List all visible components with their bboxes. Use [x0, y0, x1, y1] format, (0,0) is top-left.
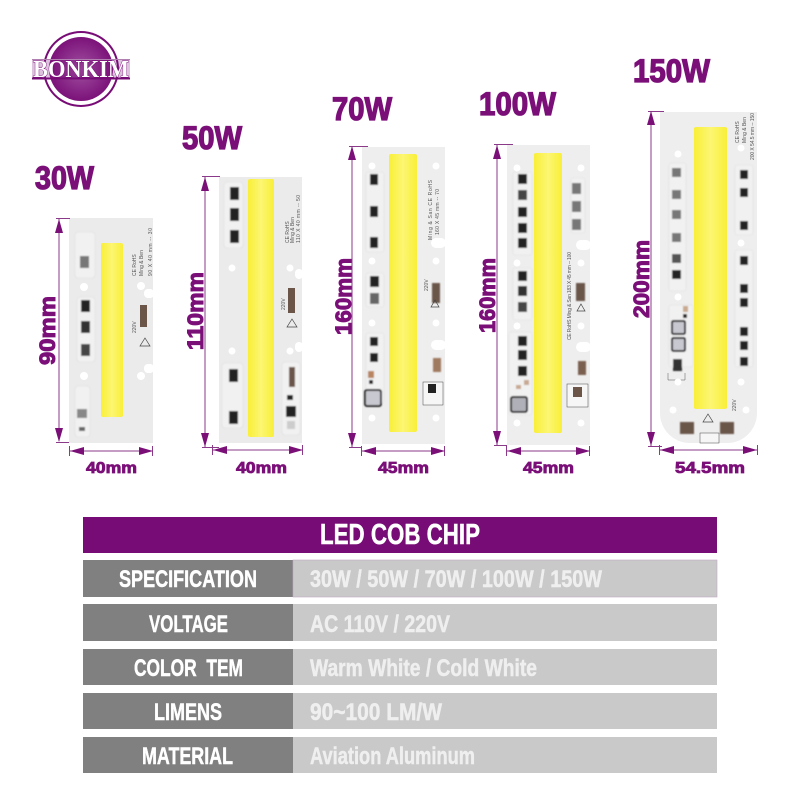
board: 70W: 220V [424, 279, 430, 291]
board: 30W [69, 218, 154, 443]
board: 70W [362, 147, 446, 444]
row: limens: 90~100 LM/W [310, 699, 442, 726]
dimension: 54.5mm width: 54.5mm [675, 460, 745, 477]
panel: 30W chip [35, 160, 154, 477]
dimension: 160mm height: 160mm [475, 258, 500, 333]
dimension: 160mm height [331, 146, 368, 448]
board: 50W: 220V [281, 298, 287, 310]
row: color temperature [83, 649, 717, 685]
row: material [83, 737, 717, 773]
heading: 150W: 150W [633, 53, 711, 89]
panel: 100W chip [475, 86, 591, 477]
row: specification: 30W / 50W / 70W / 100W / 150W [310, 566, 602, 593]
panel: 50W chip [182, 120, 303, 477]
board: 50W: CE RoHS [285, 221, 291, 243]
dimension: 200mm height: 200mm [629, 240, 654, 318]
row: specification: SPECIFICATION [119, 566, 257, 593]
board: 50W [219, 177, 303, 443]
dimension: 45mm width: 45mm [378, 460, 429, 477]
heading: 100W: 100W [479, 86, 557, 122]
panel: 150W chip [629, 53, 758, 477]
board: 150W [660, 112, 757, 443]
row: voltage [83, 604, 717, 641]
row: color temperature: COLOR TEM [134, 655, 243, 682]
board: 150W: 200 X 54.5 mm -- 150 [750, 113, 756, 160]
row: limens [83, 693, 717, 729]
dimension: 40mm width: 40mm [236, 460, 287, 477]
dimension: 110mm height: 110mm [183, 272, 208, 350]
board: 30W: 220V [132, 321, 138, 333]
dimension: 90mm height [35, 218, 70, 442]
table title [83, 517, 717, 553]
board: 100W: CE RoHS Ming & San 183 X 45 mm -- 100 [567, 252, 573, 340]
row: voltage: VOLTAGE [149, 611, 228, 638]
table: LED COB CHIP specifications [83, 517, 717, 773]
board: 50W: 110 X 40 mm -- 50 [296, 195, 302, 243]
dimension: 160mm height: 160mm [331, 258, 356, 335]
row: material: Aviation Aluminum [310, 743, 475, 770]
dimension: 160mm height [475, 144, 513, 446]
board: 150W: CE RoHS [735, 121, 741, 143]
board: 30W: Ming & Ben [139, 250, 145, 276]
dimension: 40mm width [70, 446, 153, 477]
board: 70W: Ming & San CE RoHS [428, 179, 434, 240]
board: 30W: 90 X 40 mm -- 30 [148, 228, 154, 276]
board: 70W: 160 X 45 mm -- 70 [435, 189, 441, 235]
dimension: 45mm width [362, 446, 445, 477]
heading: 70W: 70W [332, 91, 393, 127]
panel: 70W chip [331, 91, 446, 477]
heading: 50W: 50W [182, 120, 243, 156]
dimension: 90mm height: 90mm [35, 296, 60, 365]
board: 30W: CE RoHS [132, 254, 138, 276]
row: material: MATERIAL [142, 743, 233, 770]
dimension: 200mm height [629, 111, 664, 446]
logo: BONKIM [32, 31, 130, 107]
logo: BONKIM: BONKIM [33, 57, 129, 83]
board: 100W [507, 145, 591, 445]
dimension: 45mm width [506, 446, 590, 477]
row: specification [83, 560, 717, 597]
table title: LED COB CHIP [320, 519, 480, 551]
dimension: 110mm height [183, 176, 220, 448]
dimension: 40mm width: 40mm [86, 460, 137, 477]
dimension: 54.5mm width [660, 445, 758, 477]
heading: 30W: 30W [35, 160, 95, 196]
row: voltage: AC 110V / 220V [310, 611, 450, 638]
board: 150W: Ming & Ben [742, 117, 748, 143]
board: 150W: 220V [732, 399, 738, 411]
row: limens: LIMENS [154, 699, 222, 726]
dimension: 45mm width: 45mm [523, 460, 574, 477]
row: color temperature: Warm White / Cold White [310, 655, 537, 682]
board: 50W: Ming & Ben [290, 217, 296, 243]
dimension: 40mm width [212, 445, 303, 477]
